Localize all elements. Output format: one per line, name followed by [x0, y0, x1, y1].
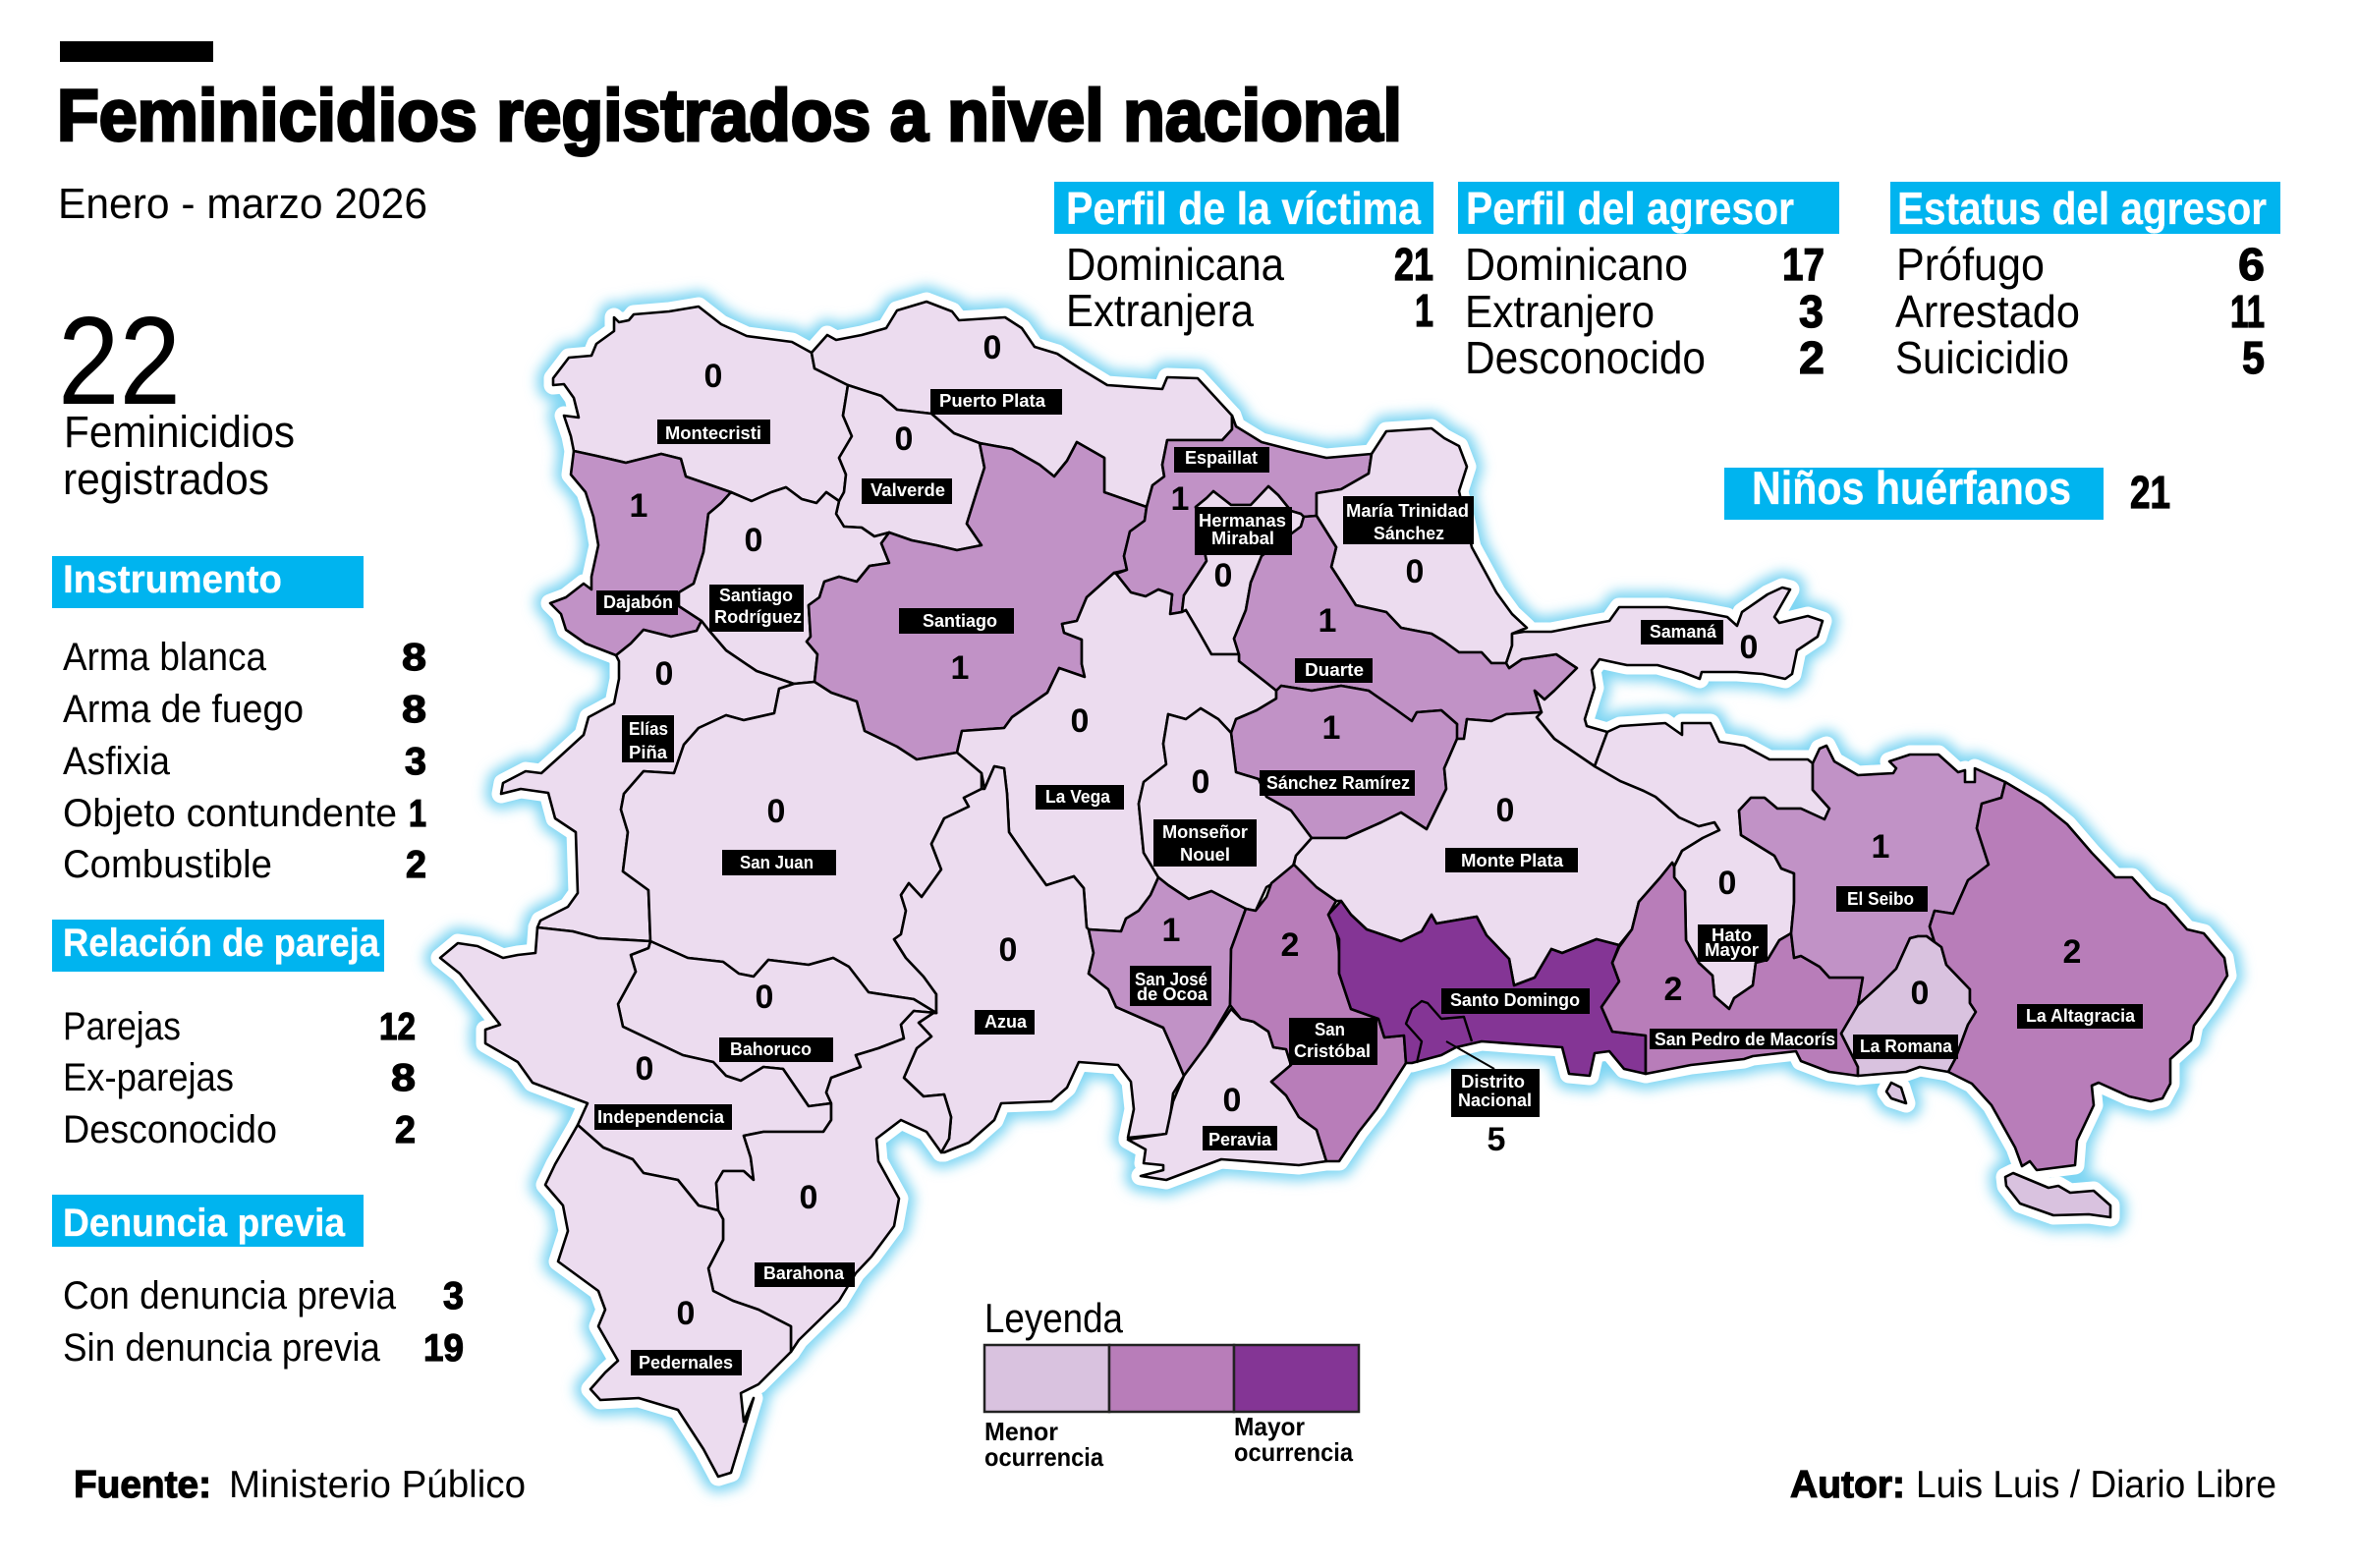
panel: instrumento: Arma blanca — [63, 636, 267, 679]
total count: Feminicidios — [64, 407, 295, 457]
label: Distrito Nacional: 5 — [1488, 1121, 1505, 1158]
province: Valverde — [836, 385, 984, 550]
panel: niños huérfanos: 21 — [2130, 467, 2170, 518]
panel: perfil de la víctima: Extranjera — [1066, 285, 1254, 336]
label: San Cristóbal — [1281, 926, 1377, 1065]
label: Espaillat: Espaillat — [1185, 448, 1258, 468]
panel: denuncia previa: Con denuncia previa — [63, 1274, 397, 1317]
province: Monte Plata — [1294, 712, 1719, 985]
province: La Romana — [1841, 936, 1976, 1076]
label: La Vega — [1036, 702, 1124, 810]
label: María Trinidad Sánchez: María Trinidad — [1346, 501, 1469, 521]
label: Espaillat: 1 — [1171, 480, 1189, 518]
label: Monseñor Nouel: Monseñor — [1162, 822, 1248, 842]
panel: instrumento: Arma de fuego — [63, 688, 304, 731]
panel: estatus del agresor: 6 — [2238, 239, 2265, 290]
province: María Trinidad Sánchez — [1317, 428, 1527, 663]
label: Independencia: Independencia — [597, 1107, 725, 1127]
province: Independencia — [440, 927, 831, 1210]
label: Samaná: 0 — [1740, 629, 1758, 666]
label: La Vega: La Vega — [1045, 787, 1111, 807]
label: San José de Ocoa: San José — [1135, 970, 1207, 989]
label: Valverde — [862, 420, 952, 504]
label: Distrito Nacional: Nacional — [1458, 1091, 1532, 1110]
label: Peravia: 0 — [1223, 1082, 1241, 1119]
label: Santiago Rodríguez — [709, 522, 804, 632]
province: Espaillat — [1116, 416, 1372, 614]
label: Barahona: 0 — [800, 1179, 817, 1216]
label: Monseñor Nouel: Nouel — [1180, 845, 1230, 865]
label: Montecristi: Montecristi — [665, 423, 761, 443]
label: Puerto Plata — [930, 329, 1062, 415]
label: Santo Domingo — [1441, 988, 1590, 1014]
legend: ocurrencia — [984, 1442, 1103, 1472]
panel: instrumento: Combustible — [63, 843, 272, 886]
label: Distrito Nacional — [1451, 1069, 1540, 1158]
label: Santiago Rodríguez: 0 — [745, 522, 762, 559]
label: Pedernales: Pedernales — [639, 1353, 733, 1372]
label: La Romana — [1853, 975, 1958, 1059]
label: El Seibo — [1836, 828, 1928, 912]
label: Bahoruco: Bahoruco — [730, 1039, 812, 1059]
label: San José de Ocoa: 1 — [1162, 912, 1180, 949]
panel: instrumento: 1 — [409, 793, 426, 835]
label: Elías Piña: Piña — [629, 743, 668, 762]
label: Azua: Azua — [984, 1012, 1028, 1032]
panel: relación de pareja: Parejas — [63, 1005, 181, 1048]
label: Duarte — [1295, 602, 1373, 683]
label: Santiago: 1 — [951, 649, 969, 687]
label: Elías Piña — [622, 655, 674, 762]
label: Monte Plata: 0 — [1496, 792, 1514, 829]
province: Sánchez Ramírez — [1231, 686, 1457, 838]
panel: niños huérfanos: Niños huérfanos — [1752, 462, 2071, 514]
panel: estatus del agresor: 5 — [2242, 332, 2265, 383]
province: Samaná — [1506, 588, 1823, 766]
label: San Pedro de Macorís: 2 — [1664, 971, 1682, 1008]
label: Hermanas Mirabal: Hermanas — [1199, 511, 1286, 531]
panel: estatus del agresor: Estatus del agresor — [1897, 183, 2267, 234]
label: El Seibo: El Seibo — [1847, 889, 1914, 909]
panel: instrumento: Objeto contundente — [63, 792, 397, 835]
label: La Romana: La Romana — [1860, 1036, 1953, 1056]
province: Pedernales — [545, 1125, 791, 1477]
label: Azua — [975, 931, 1035, 1035]
panel: estatus del agresor: Arrestado — [1895, 286, 2080, 337]
province: Hermanas Mirabal — [1182, 486, 1304, 654]
author: Luis Luis / Diario Libre — [1916, 1464, 2276, 1506]
title: Feminicidios registrados a nivel nacional — [57, 75, 1402, 156]
label: Santiago Rodríguez: Rodríguez — [714, 607, 802, 627]
province: Peravia — [1128, 1009, 1326, 1180]
label: Duarte: Duarte — [1305, 660, 1364, 680]
label: Dajabón: Dajabón — [603, 592, 673, 612]
map white coast band — [440, 302, 2227, 1477]
label: San Juan: 0 — [767, 793, 785, 830]
province: Santiago Rodríguez — [679, 487, 889, 684]
label: Azua: 0 — [999, 931, 1017, 969]
province: Puerto Plata — [812, 302, 1232, 507]
panel: perfil del agresor: 2 — [1799, 332, 1825, 383]
province: El Seibo — [1739, 746, 2005, 1005]
label: Elías Piña: 0 — [655, 655, 673, 693]
panel: estatus del agresor: 11 — [2230, 286, 2265, 337]
label: San Juan: San Juan — [740, 853, 814, 872]
label: La Romana: 0 — [1911, 975, 1929, 1012]
label: Samaná: Samaná — [1650, 622, 1717, 642]
island: Saona — [2005, 1173, 2110, 1217]
source: Ministerio Público — [229, 1464, 526, 1506]
province: Monseñor Nouel — [1139, 708, 1312, 911]
source — [74, 1464, 526, 1506]
label: Santiago: Santiago — [923, 611, 997, 631]
panel: denuncia previa: Sin denuncia previa — [63, 1326, 381, 1370]
map glow — [440, 302, 2227, 1477]
province: Hato Mayor — [1595, 723, 1829, 1009]
label: Sánchez Ramírez: Sánchez Ramírez — [1266, 773, 1410, 793]
Distrito Nacional leader line — [1446, 1041, 1494, 1069]
label: Sánchez Ramírez — [1260, 709, 1415, 796]
subtitle: Enero - marzo 2026 — [58, 180, 427, 228]
panel: perfil de la víctima: 1 — [1415, 285, 1433, 336]
province: Dajabón — [550, 451, 731, 655]
panel: estatus del agresor: Suicicidio — [1895, 332, 2069, 383]
label: Sánchez Ramírez: 1 — [1322, 709, 1340, 747]
panel: perfil del agresor: 17 — [1782, 239, 1825, 290]
label: Valverde: 0 — [895, 420, 913, 458]
province: La Altagracia — [1927, 782, 2227, 1170]
panel: perfil del agresor: 3 — [1799, 286, 1824, 337]
panel: instrumento: 2 — [406, 844, 426, 886]
label: Hermanas Mirabal — [1195, 507, 1292, 594]
label: San Juan — [722, 793, 836, 875]
label: Puerto Plata: 0 — [983, 329, 1001, 366]
panel: perfil del agresor: Extranjero — [1465, 286, 1655, 337]
province: Duarte — [1234, 516, 1577, 739]
panel: relación de pareja: 8 — [391, 1057, 416, 1099]
label: Elías Piña: Elías — [629, 719, 668, 739]
panel: perfil de la víctima: Perfil de la víctima — [1066, 183, 1421, 234]
panel: instrumento: Asfixia — [63, 740, 171, 783]
label: Santo Domingo: Santo Domingo — [1450, 990, 1580, 1010]
total count: registrados — [63, 454, 269, 504]
legend: Menor — [984, 1417, 1058, 1446]
panel: relación de pareja: Ex-parejas — [63, 1056, 234, 1099]
label: Barahona: Barahona — [763, 1263, 845, 1283]
label: Espaillat — [1171, 447, 1269, 518]
label: Hato Mayor: 0 — [1718, 865, 1736, 902]
label: María Trinidad Sánchez: Sánchez — [1374, 524, 1444, 543]
label: Independencia — [594, 1050, 732, 1130]
author: Autor: — [1790, 1464, 1905, 1506]
panel: perfil del agresor: Dominicano — [1465, 239, 1688, 290]
legend: Mayor — [1234, 1412, 1305, 1441]
panel: instrumento: Instrumento — [63, 558, 282, 601]
label: Dajabón: 1 — [630, 487, 647, 525]
panel: perfil de la víctima: 21 — [1394, 239, 1433, 290]
label: San Cristóbal: San — [1315, 1020, 1345, 1039]
panel: relación de pareja: Relación de pareja — [63, 922, 380, 965]
panel: denuncia previa: Denuncia previa — [63, 1202, 346, 1245]
province: San Pedro de Macorís — [1601, 863, 1863, 1076]
panel: relación de pareja: 2 — [395, 1109, 416, 1151]
Distrito Nacional border — [1406, 1001, 1472, 1063]
panel: relación de pareja: Desconocido — [63, 1108, 277, 1151]
label: María Trinidad Sánchez — [1343, 496, 1474, 590]
label: Montecristi — [657, 358, 770, 444]
label: San José de Ocoa — [1130, 912, 1211, 1006]
panel: denuncia previa: 19 — [423, 1327, 464, 1370]
label: La Altagracia: 2 — [2063, 933, 2081, 971]
panel: perfil del agresor: Desconocido — [1465, 332, 1706, 383]
label: Monte Plata: Monte Plata — [1461, 851, 1564, 870]
panel: denuncia previa: 3 — [443, 1275, 464, 1317]
label: Montecristi: 0 — [704, 358, 722, 395]
label: San Pedro de Macorís: San Pedro de Macorís — [1655, 1030, 1835, 1049]
top bar — [60, 41, 213, 62]
label: Monseñor Nouel — [1153, 763, 1257, 867]
province: San José de Ocoa — [1089, 877, 1246, 1076]
province: Montecristi — [553, 307, 852, 503]
legend: Leyenda — [984, 1295, 1124, 1341]
total count — [58, 291, 295, 504]
island: Catalina — [1886, 1083, 1906, 1103]
label: Hermanas Mirabal: 0 — [1214, 557, 1232, 594]
label: Peravia — [1203, 1082, 1277, 1150]
province: Santiago — [807, 442, 1147, 759]
label: Samaná — [1641, 620, 1758, 666]
panel: relación de pareja: 12 — [379, 1006, 416, 1048]
label: Peravia: Peravia — [1208, 1130, 1272, 1149]
province: Azua — [894, 766, 1184, 1152]
label: Dajabón — [596, 487, 678, 615]
province: Barahona — [708, 1011, 951, 1352]
label: Bahoruco — [719, 979, 833, 1062]
panel: perfil del agresor — [1458, 182, 1839, 383]
label: Monte Plata — [1445, 792, 1578, 872]
label: San Cristóbal: Cristóbal — [1294, 1041, 1371, 1061]
label: Santiago — [899, 608, 1014, 687]
label: La Vega: 0 — [1071, 702, 1089, 740]
label: Bahoruco: 0 — [756, 979, 773, 1016]
panel: relación de pareja — [52, 920, 416, 1151]
label: Independencia: 0 — [636, 1050, 653, 1088]
label: Barahona — [755, 1179, 855, 1287]
label: Hato Mayor: Hato — [1712, 925, 1752, 945]
label: La Altagracia: La Altagracia — [2026, 1006, 2136, 1026]
legend — [984, 1295, 1359, 1472]
label: Hato Mayor: Mayor — [1705, 940, 1759, 960]
label: Monseñor Nouel: 0 — [1192, 763, 1209, 801]
label: Valverde: Valverde — [870, 480, 945, 500]
label: Hato Mayor — [1698, 865, 1768, 962]
label: San Cristóbal: 2 — [1281, 926, 1299, 964]
panel: perfil de la víctima — [1054, 182, 1433, 336]
panel: estatus del agresor — [1890, 182, 2280, 383]
province: San Cristóbal — [1230, 865, 1406, 1161]
label: San José de Ocoa: de Ocoa — [1137, 984, 1208, 1004]
panel: instrumento — [52, 556, 426, 886]
source: Fuente: — [74, 1464, 211, 1506]
label: Duarte: 1 — [1319, 602, 1336, 640]
label: El Seibo: 1 — [1872, 828, 1889, 866]
label: Hermanas Mirabal: Mirabal — [1211, 529, 1274, 548]
panel: instrumento: 8 — [402, 637, 426, 679]
label: Pedernales: 0 — [677, 1295, 695, 1332]
panel: instrumento: 3 — [405, 741, 426, 783]
total count: 22 — [58, 291, 181, 430]
panel: estatus del agresor: Prófugo — [1896, 239, 2045, 290]
label: La Altagracia — [2017, 933, 2143, 1029]
label: María Trinidad Sánchez: 0 — [1406, 553, 1424, 590]
panel: perfil de la víctima: Dominicana — [1066, 239, 1284, 290]
province: San Juan — [621, 682, 982, 1013]
map: provinces — [440, 302, 2227, 1477]
panel: perfil del agresor: Perfil del agresor — [1466, 183, 1794, 234]
province: Bahoruco — [618, 941, 936, 1106]
label: Pedernales — [631, 1295, 742, 1375]
province: Santo Domingo — [1328, 901, 1646, 1076]
label: Santiago Rodríguez: Santiago — [719, 586, 793, 605]
panel: instrumento: 8 — [402, 689, 426, 731]
label: Puerto Plata: Puerto Plata — [939, 391, 1046, 411]
legend: ocurrencia — [1234, 1437, 1353, 1467]
province: La Vega — [957, 573, 1276, 931]
label: San Pedro de Macorís — [1650, 971, 1837, 1049]
province: Elías Piña — [501, 621, 794, 941]
label: Distrito Nacional: Distrito — [1461, 1072, 1525, 1092]
panel: denuncia previa — [52, 1195, 464, 1370]
